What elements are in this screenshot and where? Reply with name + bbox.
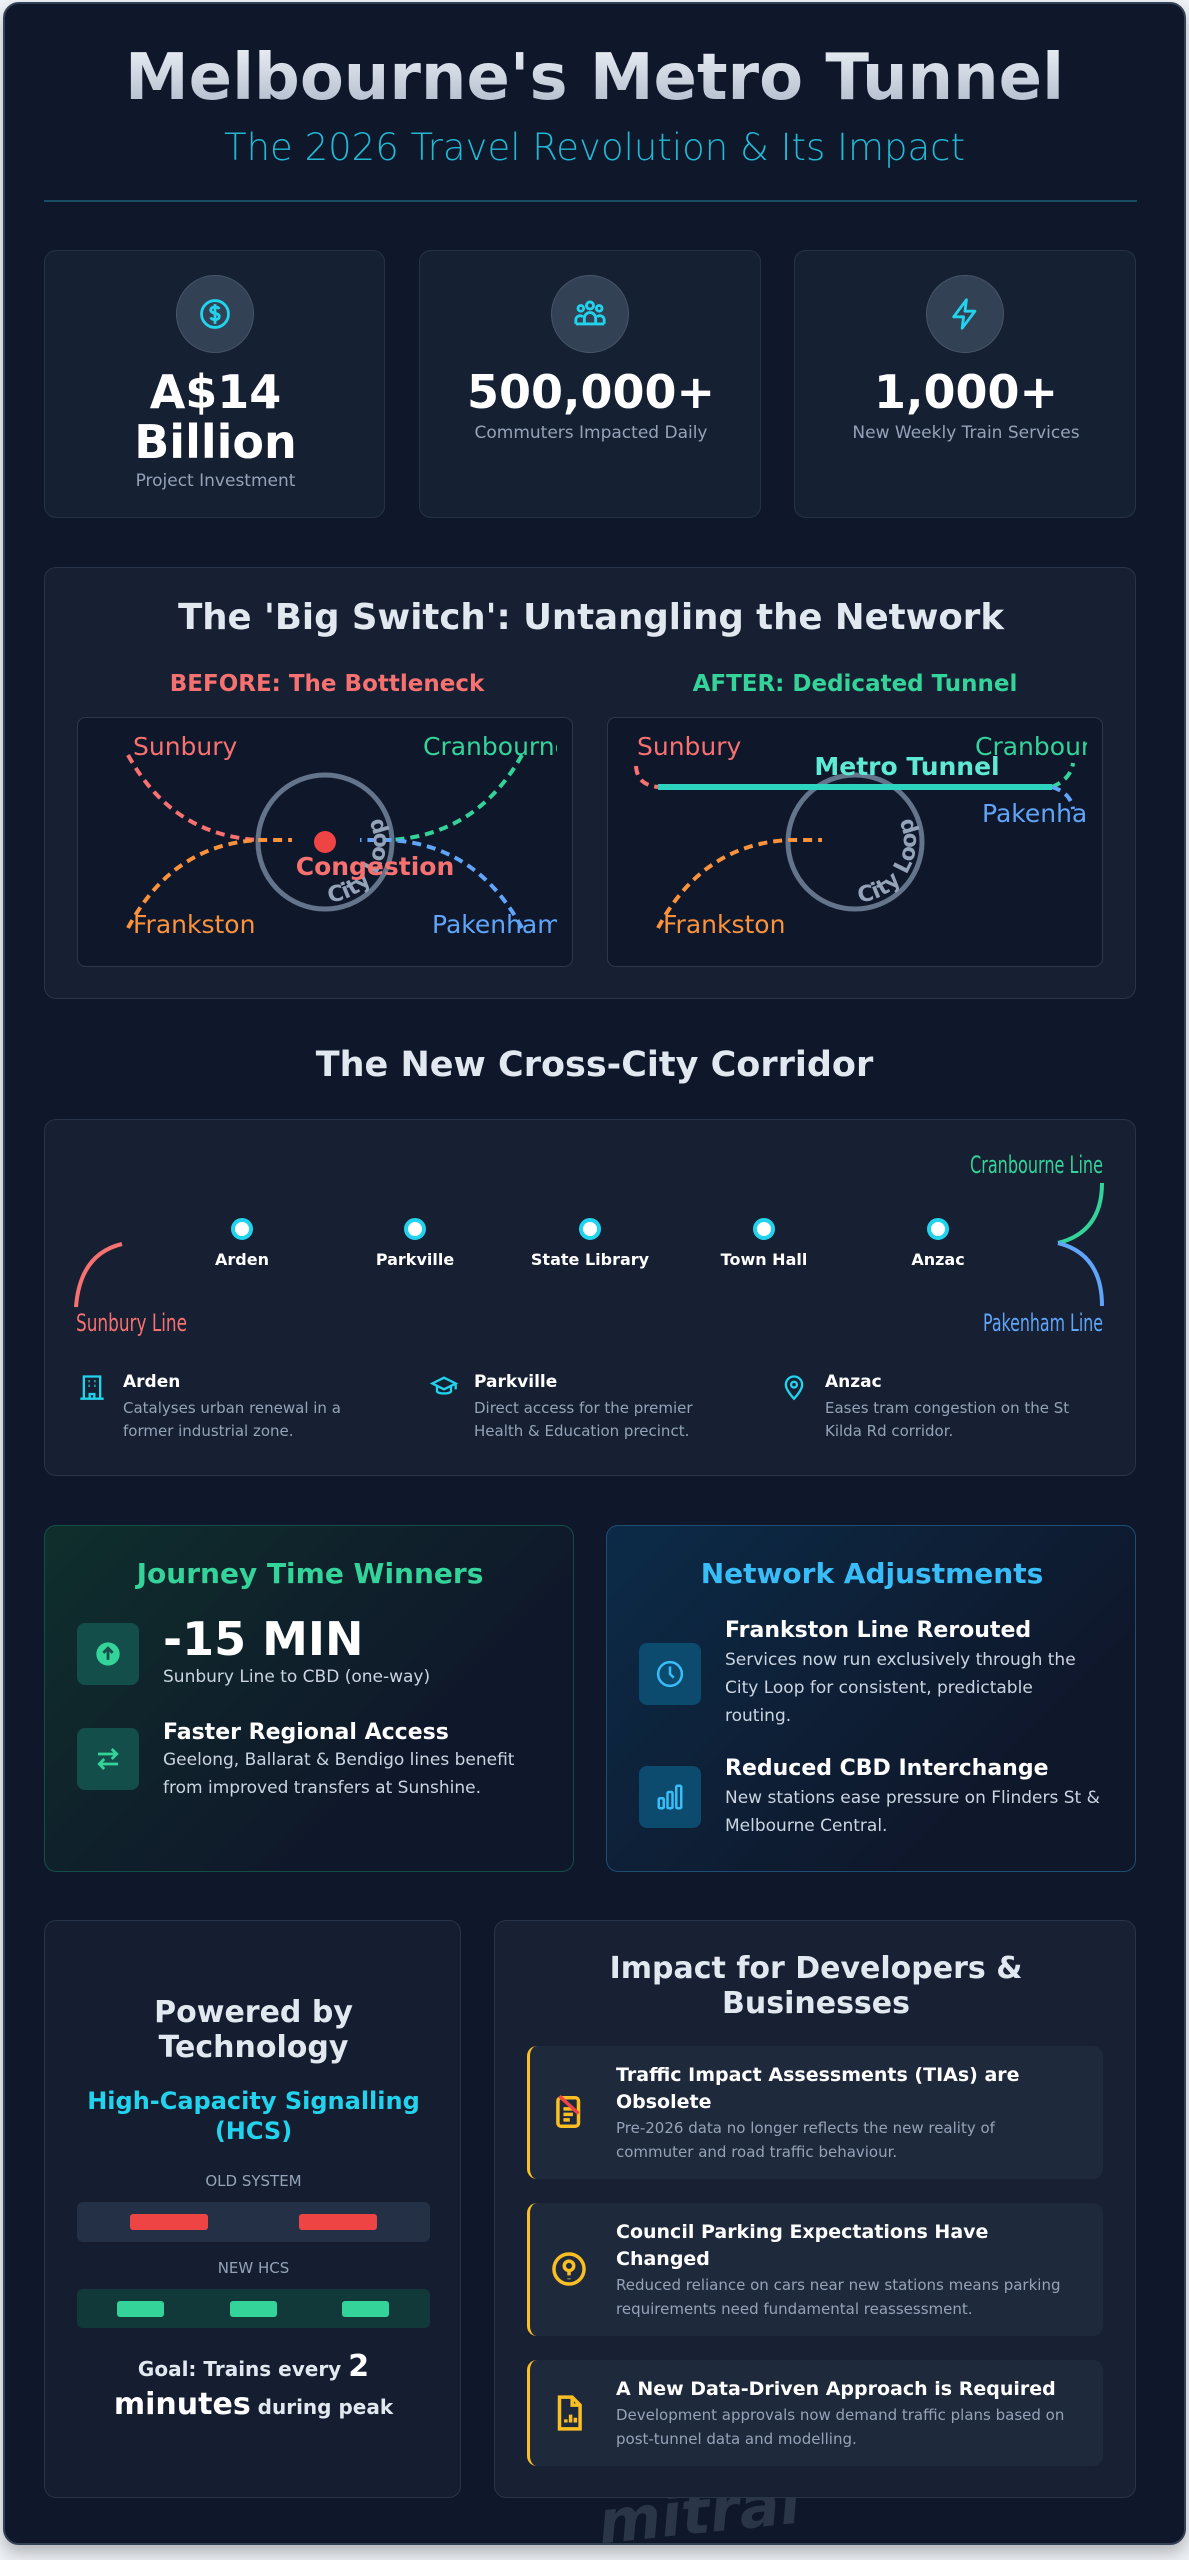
diagram: after: Frankston (663, 910, 785, 939)
info: anzac (784, 1372, 1069, 1440)
after label: AFTER: Dedicated Tunnel (693, 671, 1017, 697)
info: arden: Arden (123, 1372, 180, 1392)
value (134, 365, 297, 469)
corridor map: Pakenham Line (983, 1309, 1103, 1337)
panel: powered by technology (44, 1920, 461, 2498)
panel: big switch (44, 567, 1136, 999)
icon: bolt (926, 275, 1004, 353)
item: interchange: Reduced CBD Interchange (725, 1756, 1048, 1781)
goal text: minutes during peak (114, 2387, 393, 2422)
item: frankston (639, 1618, 1076, 1726)
stat card: investment (44, 250, 385, 518)
icon: pin (784, 1375, 804, 1400)
info: anzac: Anzac (825, 1372, 882, 1392)
info: parkville: Parkville (474, 1372, 557, 1392)
icon: document struck (556, 2094, 580, 2128)
label: New Weekly Train Services (852, 423, 1080, 443)
impact item: data-driven (527, 2360, 1103, 2466)
item: frankston: Services now run exclusively through the City Loop for consistent, predictable routing. (725, 1650, 1076, 1726)
title: Melbourne's Metro Tunnel (125, 41, 1064, 115)
item: regional access: Geelong, Ballarat & Bendigo lines benefit from improved transfers at Sunshine. (163, 1750, 514, 1798)
item: interchange: New stations ease pressure on Flinders St & Melbourne Central. (725, 1788, 1100, 1836)
heading: Journey Time Winners (137, 1557, 483, 1590)
diagram: after: Sunbury (637, 732, 742, 761)
impact item: parking (527, 2203, 1103, 2336)
diagram: after: City Loop (858, 820, 920, 902)
goal text: Goal: Trains every 2 (138, 2349, 369, 2384)
impact heading: Businesses (722, 1986, 910, 2021)
watermark: mitrai (595, 2468, 804, 2558)
panel: impact for developers (494, 1920, 1136, 2498)
icon: graduation cap (430, 1376, 458, 1395)
corridor map: Anzac (911, 1250, 965, 1269)
value: Billion (134, 415, 297, 469)
icon: dollar (176, 275, 254, 353)
info: anzac: Eases tram congestion on the St Kilda Rd corridor. (825, 1399, 1069, 1440)
impact item: data-driven: Development approvals now demand traffic plans based on post-tunnel data and modelling. (616, 2406, 1064, 2448)
heading: Network Adjustments (701, 1557, 1043, 1590)
subheading: (HCS) (215, 2117, 292, 2145)
before label: BEFORE: The Bottleneck (170, 671, 484, 697)
item: regional access: Faster Regional Access (163, 1720, 449, 1745)
value: A$14 (150, 365, 281, 419)
diagram: before: Pakenham (432, 910, 562, 939)
info: arden: Catalyses urban renewal in a former industrial zone. (123, 1399, 341, 1440)
diagram: before: Frankston (133, 910, 255, 939)
stat card: services (794, 250, 1136, 518)
heading (154, 1995, 353, 2065)
old system bar (77, 2172, 430, 2242)
label: Commuters Impacted Daily (474, 423, 708, 443)
diagram: before: Cranbourne (423, 732, 570, 761)
diagram: before: Sunbury (133, 732, 238, 761)
info: parkville: Direct access for the premier Health & Education precinct. (474, 1399, 693, 1440)
subtitle: The 2026 Travel Revolution & Its Impact (224, 126, 965, 169)
panel: corridor (44, 1119, 1136, 1476)
impact heading: Impact for Developers & (610, 1951, 1022, 1986)
label: Project Investment (136, 471, 295, 491)
diagram: before: City Loop (328, 820, 390, 902)
value: 500,000+ (467, 365, 715, 419)
item: regional access (77, 1720, 514, 1798)
item: -15 min: -15 MIN (163, 1612, 364, 1666)
diagram: before: Congestion (296, 852, 454, 881)
impact item: data-driven: A New Data-Driven Approach is Required (616, 2378, 1056, 2400)
impact item: parking: Council Parking Expectations Have Changed (616, 2221, 988, 2270)
info: parkville (430, 1372, 693, 1440)
old system bar: OLD SYSTEM (205, 2172, 302, 2190)
icon: people (551, 275, 629, 353)
item: interchange (639, 1756, 1100, 1836)
impact heading (610, 1951, 1022, 2021)
impact item: TIAs (527, 2046, 1103, 2179)
heading: Powered by (154, 1995, 353, 2030)
corridor map: Town Hall (721, 1250, 807, 1269)
item: frankston: Frankston Line Rerouted (725, 1618, 1031, 1643)
corridor map: Parkville (376, 1250, 454, 1269)
item: -15 min (77, 1612, 430, 1687)
info: arden (80, 1372, 341, 1440)
impact item: TIAs: Traffic Impact Assessments (TIAs) are Obsolete (616, 2064, 1020, 2113)
heading: Technology (159, 2030, 348, 2065)
stat card: commuters (419, 250, 761, 518)
goal text (114, 2349, 394, 2422)
value: 1,000+ (874, 365, 1058, 419)
corridor map (74, 1151, 1104, 1337)
icon: parking pin (552, 2252, 586, 2286)
item: -15 min: Sunbury Line to CBD (one-way) (163, 1667, 430, 1687)
heading: cross-city corridor: The New Cross-City Corridor (316, 1045, 873, 1085)
new hcs bar: NEW HCS (218, 2259, 289, 2277)
icon: data file (558, 2395, 582, 2431)
impact item: TIAs: Pre-2026 data no longer reflects the new reality of commuter and road traffic behaviour. (616, 2119, 995, 2161)
subheading: High-Capacity Signalling (87, 2087, 420, 2115)
impact item: parking: Reduced reliance on cars near new stations means parking requirements need fundamental reassessment. (616, 2276, 1060, 2318)
corridor map: Arden (215, 1250, 269, 1269)
corridor map: State Library (531, 1250, 650, 1269)
new hcs bar (77, 2259, 430, 2328)
corridor map: Cranbourne Line (970, 1151, 1103, 1179)
diagram: after (607, 717, 1103, 967)
icon: building (80, 1375, 104, 1400)
diagram: after: Metro Tunnel (814, 752, 1000, 781)
heading: The 'Big Switch': Untangling the Network (178, 597, 1004, 638)
panel: journey time winners (44, 1525, 574, 1872)
corridor map: Sunbury Line (76, 1309, 187, 1337)
diagram: before (77, 717, 573, 967)
subheading (87, 2087, 420, 2145)
panel: network adjustments (606, 1525, 1136, 1872)
